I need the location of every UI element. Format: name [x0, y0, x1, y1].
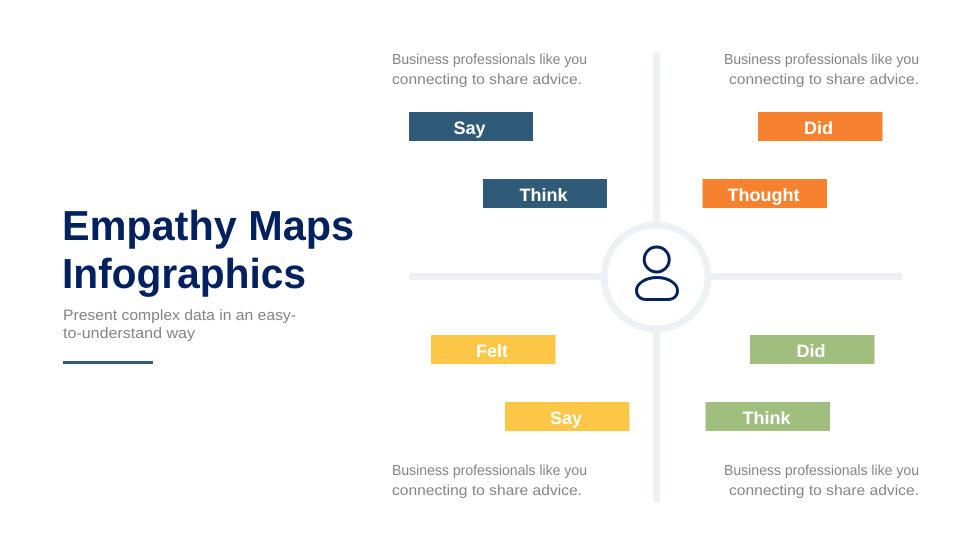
- text block: bottom left: Business professionals like you: [392, 463, 587, 479]
- label: Thought (top right): Thought: [728, 185, 799, 205]
- label: Think (bottom right): [706, 402, 830, 431]
- label: Felt (bottom left): [431, 335, 556, 364]
- subtitle: Present complex data in an easy-: [63, 307, 296, 324]
- label: Did (top right): [758, 112, 882, 141]
- text block: top right: connecting to share advice.: [729, 72, 919, 88]
- label: Did (bottom right): [750, 335, 874, 364]
- cross axes: [409, 52, 902, 502]
- text block: top left: Business professionals like you: [392, 52, 587, 68]
- label: Say (bottom left): Say: [550, 408, 582, 428]
- label: Think (bottom right): Think: [742, 408, 791, 428]
- label: Think (top left): [483, 179, 607, 208]
- label: Thought (top right): [702, 179, 827, 208]
- center person icon: [604, 225, 708, 329]
- label: Say (top left): [409, 112, 533, 141]
- title: Empathy Maps: [62, 202, 354, 249]
- subtitle: to-understand way: [63, 325, 196, 342]
- subtitle: [63, 307, 296, 342]
- text block: bottom right: connecting to share advice.: [729, 483, 919, 499]
- title underline accent: [63, 361, 153, 364]
- label: Think (top left): Think: [520, 185, 568, 205]
- label: Say (top left): Say: [453, 118, 486, 138]
- title: [62, 202, 354, 297]
- text block: bottom left: connecting to share advice.: [392, 483, 582, 499]
- text block: top right: [724, 52, 919, 88]
- text block: top right: Business professionals like you: [724, 52, 919, 68]
- label: Did (top right): Did: [804, 118, 833, 138]
- text block: top left: [392, 52, 587, 88]
- label: Felt (bottom left): Felt: [476, 341, 508, 361]
- text block: bottom left: [392, 463, 587, 499]
- label: Say (bottom left): [505, 402, 630, 431]
- label: Did (bottom right): Did: [796, 341, 826, 361]
- text block: bottom right: Business professionals like you: [724, 463, 919, 479]
- title: Infographics: [62, 250, 306, 297]
- text block: bottom right: [724, 463, 919, 499]
- text block: top left: connecting to share advice.: [392, 72, 582, 88]
